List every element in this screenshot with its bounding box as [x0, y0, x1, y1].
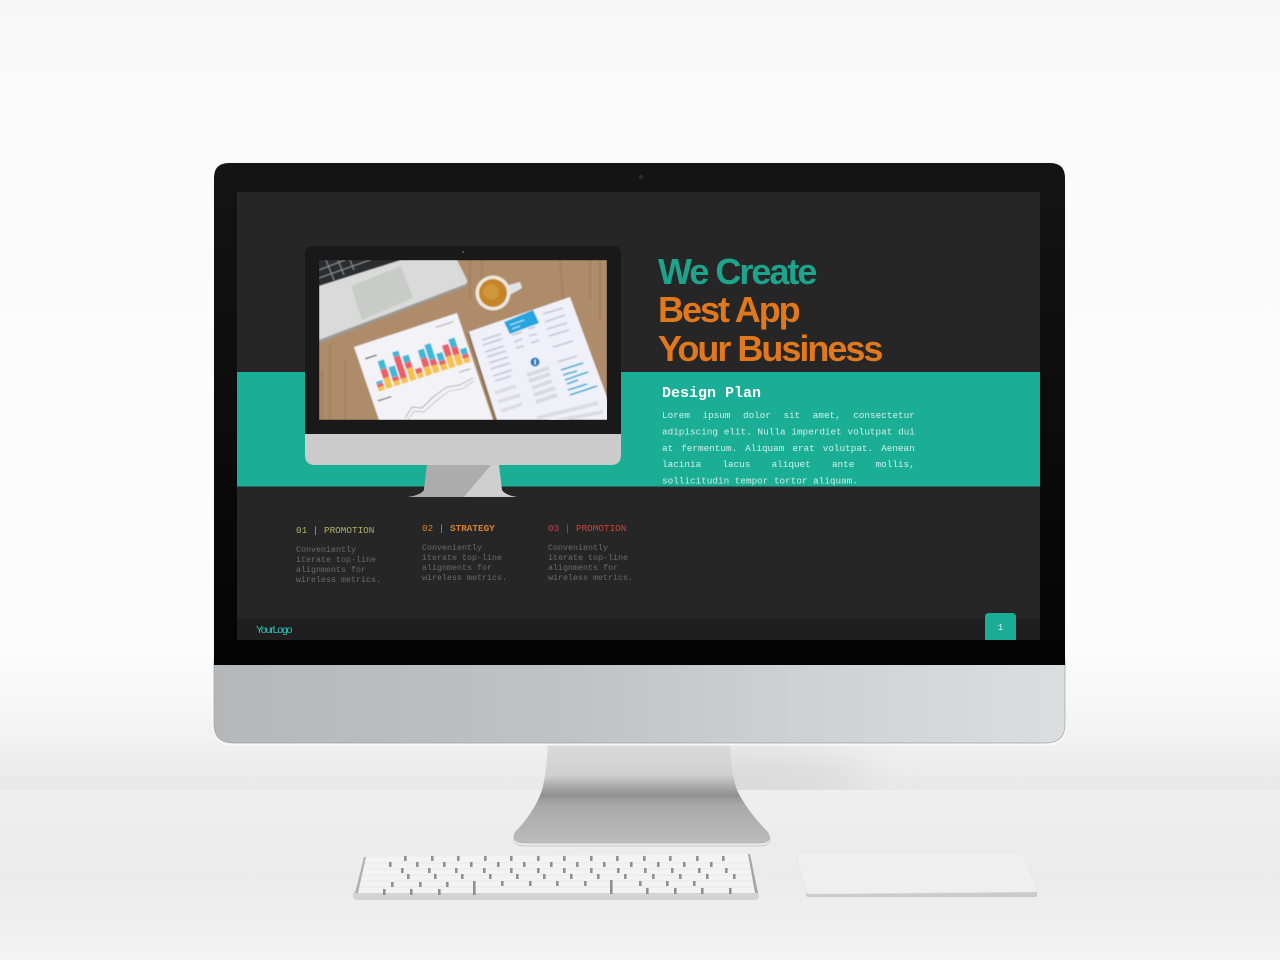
logo: YourLogo [256, 624, 293, 636]
item 01 promotion: alignments for [296, 565, 366, 575]
paragraph: Lorem ipsum dolor sit amet, consectetur [662, 410, 915, 421]
item 02 strategy: 02 | STRATEGY [422, 523, 495, 534]
paragraph: lacinia lacus aliquet ante mollis, [662, 459, 915, 470]
teal band [237, 372, 1040, 486]
photo: desk with reports [319, 260, 608, 423]
item 01 promotion [296, 525, 381, 585]
camera [638, 174, 644, 180]
slide screen [237, 192, 1040, 640]
trackpad [797, 853, 1037, 897]
item 03 promotion: alignments for [548, 563, 618, 573]
item 01 promotion: wireless metrics. [296, 575, 381, 585]
footer band [237, 618, 1040, 640]
item 01 promotion: 01 | PROMOTION [296, 525, 374, 536]
small monitor mockup [305, 246, 621, 497]
text report [467, 297, 608, 423]
laptop [319, 260, 467, 343]
page number tag: 1 [998, 623, 1003, 633]
slide background [237, 192, 1040, 640]
background: wall and table [0, 741, 1280, 938]
item 01 promotion: Conveniently [296, 545, 356, 555]
item 02 strategy [422, 523, 507, 583]
item 02 strategy: wireless metrics. [422, 573, 507, 583]
small monitor frame [305, 246, 621, 434]
item 02 strategy: iterate top-line [422, 553, 502, 563]
keyboard [353, 854, 759, 900]
camera dot [462, 251, 464, 253]
heading [658, 251, 882, 369]
subheading: Design Plan [662, 385, 761, 402]
monitor bezel [214, 163, 1065, 665]
key gaps [355, 854, 758, 895]
item 02 strategy: Conveniently [422, 543, 482, 553]
stacked bars [376, 337, 472, 392]
coffee cup [476, 276, 522, 310]
monitor rim [212, 162, 1066, 746]
wood desk [319, 260, 607, 420]
heading: Best App [658, 289, 800, 330]
small monitor stand [408, 465, 517, 497]
item 03 promotion [548, 523, 633, 583]
line chart [405, 378, 473, 418]
keyboard body [353, 892, 759, 900]
text block: design plan [662, 385, 915, 486]
item 02 strategy: alignments for [422, 563, 492, 573]
monitor chin [214, 660, 1065, 743]
keyboard keys [355, 854, 758, 893]
page number tag [985, 613, 1016, 640]
chart report [354, 313, 493, 420]
paragraph: adipiscing elit. Nulla imperdiet volutpat dui [662, 426, 915, 438]
paragraph [662, 410, 915, 486]
item 03 promotion: wireless metrics. [548, 573, 633, 583]
paragraph: sollicitudin tempor tortor aliquam. [662, 476, 858, 486]
heading: We Create [658, 251, 816, 292]
item 01 promotion: iterate top-line [296, 555, 376, 565]
key rows [357, 863, 755, 887]
heading: Your Business [658, 328, 882, 369]
item 03 promotion: Conveniently [548, 543, 608, 553]
desktop monitor [212, 162, 1066, 746]
small monitor chin [305, 434, 621, 465]
desktop monitor stand [514, 743, 770, 846]
item 03 promotion: iterate top-line [548, 553, 628, 563]
paragraph: at fermentum. Aliquam erat volutpat. Aenean [662, 443, 915, 454]
item 03 promotion: 03 | PROMOTION [548, 523, 626, 534]
